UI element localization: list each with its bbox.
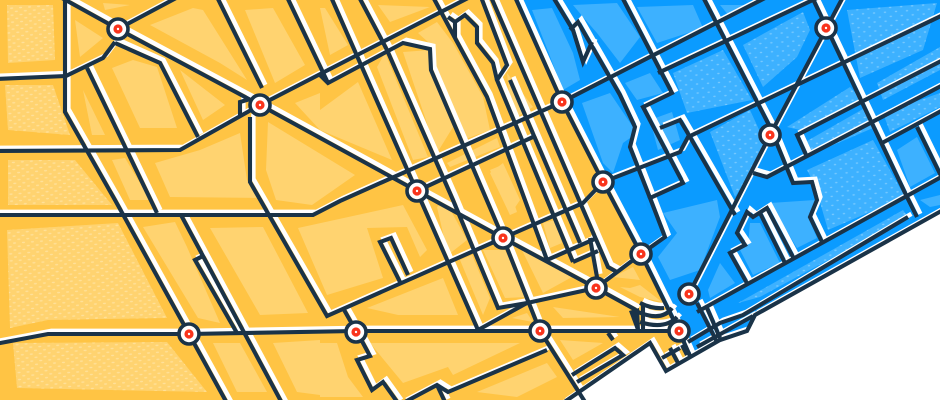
yellow block texture [5,5,207,392]
station 1 [108,19,128,39]
station 15 [179,324,199,344]
station 14 [346,322,366,342]
station 10 [760,125,780,145]
station 7 [593,172,613,192]
station 13 [530,321,550,341]
station 2 [250,95,270,115]
station 8 [552,92,572,112]
station 11 [679,284,699,304]
station 3 [407,181,427,201]
yellow city blocks [5,3,662,397]
background: blue district [517,0,940,356]
station 9 [816,18,836,38]
station 12 [669,321,689,341]
background: yellow district [0,0,690,400]
station 6 [631,244,651,264]
station 4 [493,228,513,248]
interchange knot [629,308,640,330]
blue city blocks [532,3,940,303]
station 5 [586,278,606,298]
blue block texture [673,3,940,303]
station nodes [108,18,836,344]
